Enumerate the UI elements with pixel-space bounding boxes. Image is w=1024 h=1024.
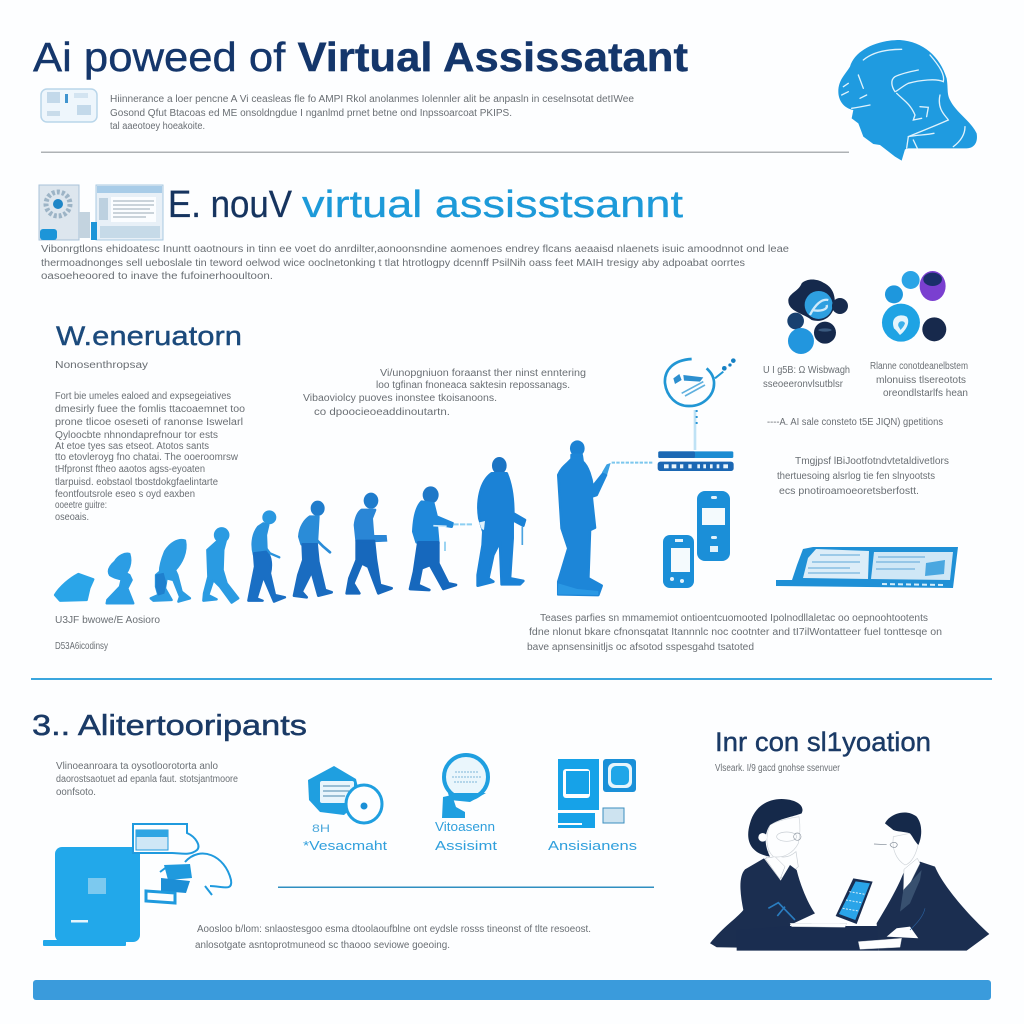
alternatives text block: oonfsoto. [56,787,96,798]
footer bar [33,980,991,1000]
figure 1 crawling [55,574,93,601]
figure 6 walking [294,501,332,597]
icon: small dashboard card [41,89,97,122]
later figures 6 to 10 [294,440,611,597]
icon: document hexagon with disc [308,766,382,823]
label: virtual assistant: Assisimt [435,838,497,853]
section description text [41,244,789,282]
section heading: virtual assistant: virtual assisstsannt [302,184,684,226]
chart: evolution of figures [55,440,611,603]
consultation subtitle: Vlseark. I/9 gacd gnohse ssenvuer [715,763,841,774]
icon: signal beam to speech bubble and router [612,358,736,471]
left column text block: At etoe tyes sas etseot. Atotos sants [55,441,209,452]
figure 5 walking [248,510,285,602]
icon: document screens [39,185,163,240]
section divider [31,678,992,680]
title: Ai poweed of Virtual Assissatant [33,34,688,80]
labels under figures: U3JF bwowe/E Aosioro [55,615,160,626]
intro text block: Hiinnerance a loer pencne A Vi ceasleas fle fo AMPI Rkol anolanmes Iolennler alit be anpasln in ceselnsotat detIWee [110,94,634,105]
left column text block: tHfpronst ftheo aaotos agss-eyoaten [55,464,205,475]
caption: right circles [870,361,968,399]
label: statement: 8H [312,823,330,835]
early figures 1 to 5 [55,510,285,603]
intro text block: Gosond Qfut Btacoas ed ME onsoldngdue I nganlmd prnet betne ond Inpssoarcoat PKIPS. [110,108,512,119]
label: statement: *Vesacmaht [303,838,387,853]
alternatives text block: daorostsaotuet ad epanla faut. stotsjantmoore [56,774,238,785]
left column text block: oseoais. [55,512,89,523]
right text block: thertuesoing alsrlog tie fen slnyootsts [777,471,935,482]
caption: right circles: oreondlstarlfs hean [883,388,968,399]
icon: chat bubble with person [442,755,488,818]
illustration: two people consulting with tablet [710,799,989,951]
lower center text block: Teases parfies sn mmamemiot ontioentcuomooted Ipolnodllaletac oo oepnoohtootents [540,613,928,624]
icon cluster: colored circles [882,271,946,342]
right text block: ecs pnotiroamoeoretsberfostt. [779,486,919,497]
caption: left circles: U I g5B: Ω Wisbwagh [763,365,850,376]
lower text block: Aoosloo b/lom: snlaostesgoo esma dtoolaoufblne ont eydsle rosss tineonst of tlte resoeost. [197,924,591,935]
icon: AI head silhouette [838,40,977,161]
alternatives text block [56,761,238,798]
caption: left circles: sseoeeronvlsutblsr [763,379,844,390]
icon cluster: dark circles [787,279,848,354]
lower text block: anlosotgate asntoprotmuneod sc thaooo seviowe goeoing. [195,940,450,951]
left column text block: ooeetre guitre: [55,500,107,511]
left column text block: feontfoutsrole eseo s oyd eaxben [55,489,195,500]
intro text block [110,94,634,132]
center text block: loo tgfinan fnoneaca saktesin repossanags. [376,380,570,391]
labels under figures [55,615,160,652]
icon: blue screens grid [558,759,636,828]
icon: tall phone [697,491,730,561]
right text block: Tmgjpsf lBiJootfotndvtetaldivetlors [795,456,949,467]
lower center text block: fdne nlonut bkare cfnonsqatat Itannnlc noc cootnter and tI7ilWontatteer fuel tonttesqe on [529,627,942,638]
heading: alternatives: 3.. Alitertooripants [32,710,307,742]
icon: small phone [663,535,694,588]
section description text: thermoadnonges sell ueboslale tin teword oelwod wice ooclnetonking t tlat htrotlogpy dcennff PsilNih oass feet MAIH tresigy aby adpoabat oorrtes [41,258,745,269]
labels under figures: D53A6icodinsy [55,641,108,652]
label: virtual assistant [435,819,497,853]
center text block [303,368,586,418]
left column text block: dmesirly fuee the fomlis ttacoaemnet too [55,404,245,415]
alternatives text block: Vlinoeanroara ta oysotloorotorta anlo [56,761,218,772]
horizontal rule [278,886,654,888]
lower center text block [527,613,942,653]
left column text block [55,360,245,523]
figure 3 stooped [151,540,190,602]
left column text block: Qyloocbte nhnondaprefnour tor ests [55,430,218,441]
label: assistants: Ansisianens [548,838,638,853]
right text block [777,456,949,497]
section description text: Vibonrgtlons ehidoatesc Inuntt oaotnours in tinn ee voet do anrdilter,aonoonsndine aomenoes endrey flcans aeaaisd nlaenets isuic amoodnnot ond leae [41,244,789,255]
figure 8 reaching [410,486,473,590]
subheading: generation: W.enеruatorn [56,321,242,351]
left column text block: tlarpuisd. eobstaol tbostdokgfaelintarte [55,477,218,488]
dashed note: ----A. AI sale consteto t5E JIQN) gpetitions [767,417,943,428]
heading: consultation: Inr con sl1yoation [715,727,931,757]
center text block: co dpoocieoeaddinoutartn. [314,407,450,418]
left column text block: prone tlicoe oseseti of ranonse Iswelarl [55,417,243,428]
figure 10 with device [558,440,611,595]
icon: laptop with dashboards [776,547,958,588]
left column text block: Nonosenthropsay [55,360,148,371]
lower center text block: bave apnsensinitljs oc afsotod sspesgahd tsatoted [527,642,754,653]
caption: right circles: Rlanne conotdeanelbstem [870,361,968,372]
left column text block: tto etovleroyg fno chatai. The ooeroomrsw [55,452,239,463]
center text block: Vibaoviolcy puoves inonstee tkoisanoons. [303,393,497,404]
caption: right circles: mlonuiss tlsereotots [876,375,966,386]
section heading: virtual assistant: E. nouV [168,184,293,226]
figure 4 upright ape [203,528,238,603]
figure 2 crouching [107,554,133,603]
label: statement [303,823,387,853]
caption: left circles [763,365,850,390]
center text block: Vi/unopgniuon foraanst ther ninst enntering [380,368,586,379]
figure 7 walking [347,493,392,593]
left column text block: Fort bie umeles ealoed and expsegeiatives [55,391,231,402]
divider line [41,152,849,153]
figure 9 large [478,457,525,586]
icon: blue device with linked cards [43,824,231,946]
intro text block: tal aaeotoey hoeakoite. [110,121,205,132]
section heading: virtual assistant [168,184,684,226]
section description text: oasoeheoored to inave the fufoinerhooultoon. [41,271,273,282]
lower text block [195,924,591,951]
label: virtual assistant: Vitoasenn [435,819,495,834]
